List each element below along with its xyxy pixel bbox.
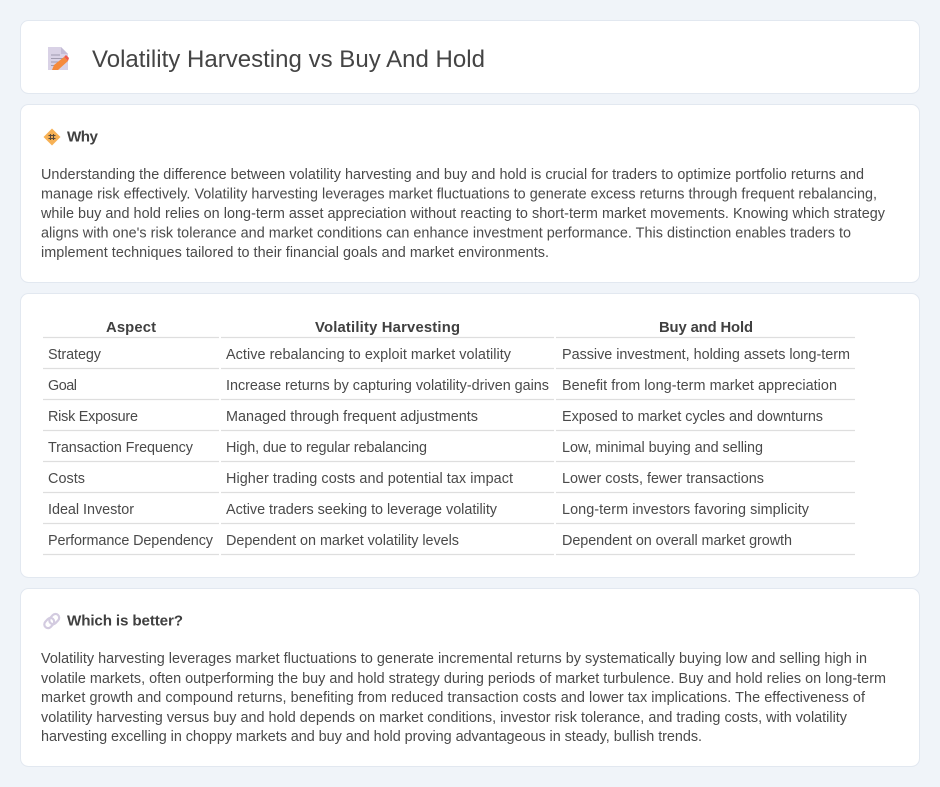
text block: why [40,167,886,261]
row: ideal investor: Ideal Investor [48,502,134,518]
text block: why: implement techniques tailored to their financial goals and market environments. [41,245,549,261]
row: goal [48,378,837,394]
title: Volatility Harvesting vs Buy And Hold [92,46,485,73]
row: transaction frequency: Low, minimal buying and selling [562,440,763,456]
row: costs: Costs [48,471,85,487]
row: ideal investor [48,502,810,518]
heading: why: Why [67,128,99,146]
row: costs [48,471,764,487]
panel: which is better [20,588,920,766]
row: costs: Higher trading costs and potential tax impact [226,471,513,487]
text block: why: manage risk effectively. Volatility harvesting leverages market fluctuations to generate excess returns through frequent rebalancing, [41,186,877,202]
icon: document with pencil [48,47,69,70]
panel: why [20,104,920,282]
text block: which is better: volatility harvesting versus buy and hold depends on market conditions, investor risk tolerance, and trading costs, with volatility [41,710,848,726]
text block: which is better [41,651,886,745]
text block: which is better: market growth and compound returns, benefiting from reduced transaction costs and lower tax implications. The effectiveness of [41,690,866,706]
row: strategy: Passive investment, holding assets long-term [562,347,850,363]
text block: which is better: Volatility harvesting leverages market fluctuations to generate incremental returns by systematically buying low and selling high in [41,651,867,667]
row: performance dependency [48,533,792,549]
text block: why: while buy and hold relies on long-term asset appreciation without reacting to short-term market movements. Knowing which strategy [40,206,886,222]
row: strategy: Strategy [48,347,102,363]
row: transaction frequency [48,440,763,456]
panel: comparison table [20,294,920,578]
row: goal: Increase returns by capturing volatility-driven gains [226,378,549,394]
row: ideal investor: Active traders seeking to leverage volatility [226,502,498,518]
row: performance dependency: Dependent on overall market growth [562,533,792,549]
row: strategy: Active rebalancing to exploit market volatility [226,347,512,363]
row: performance dependency: Performance Dependency [48,533,214,549]
table header: Buy and Hold [659,320,753,336]
text block: which is better: harvesting excelling in choppy markets and buy and hold proving advantageous in steady, bullish trends. [41,729,702,745]
row: risk exposure: Exposed to market cycles and downturns [562,409,823,425]
icon: orange diamond [44,128,60,146]
table header: Aspect [106,320,156,336]
panel: header [20,20,920,94]
row: strategy [48,347,850,363]
text block: why: aligns with one's risk tolerance and market conditions can enhance investment performance. This distinction enables traders to [41,226,851,242]
row: goal: Benefit from long-term market appreciation [562,378,837,394]
row: ideal investor: Long-term investors favoring simplicity [562,502,810,518]
heading: which is better: Which is better? [67,612,183,630]
text block: which is better: volatile markets, often outperforming the buy and hold strategy during periods of market turbulence. Buy and hold relies on long-term [41,671,886,687]
row: transaction frequency: Transaction Frequency [48,440,194,456]
row: risk exposure: Risk Exposure [48,409,138,425]
row: performance dependency: Dependent on market volatility levels [226,533,459,549]
table header [106,320,753,336]
icon: chain link [43,612,61,630]
row: risk exposure [48,409,823,425]
row: costs: Lower costs, fewer transactions [562,471,764,487]
table header: Volatility Harvesting [315,320,460,336]
row: risk exposure: Managed through frequent adjustments [226,409,478,425]
row: goal: Goal [48,378,77,394]
text block: why: Understanding the difference between volatility harvesting and buy and hold is crucial for traders to optimize portfolio returns and [41,167,864,183]
row: transaction frequency: High, due to regular rebalancing [226,440,427,456]
